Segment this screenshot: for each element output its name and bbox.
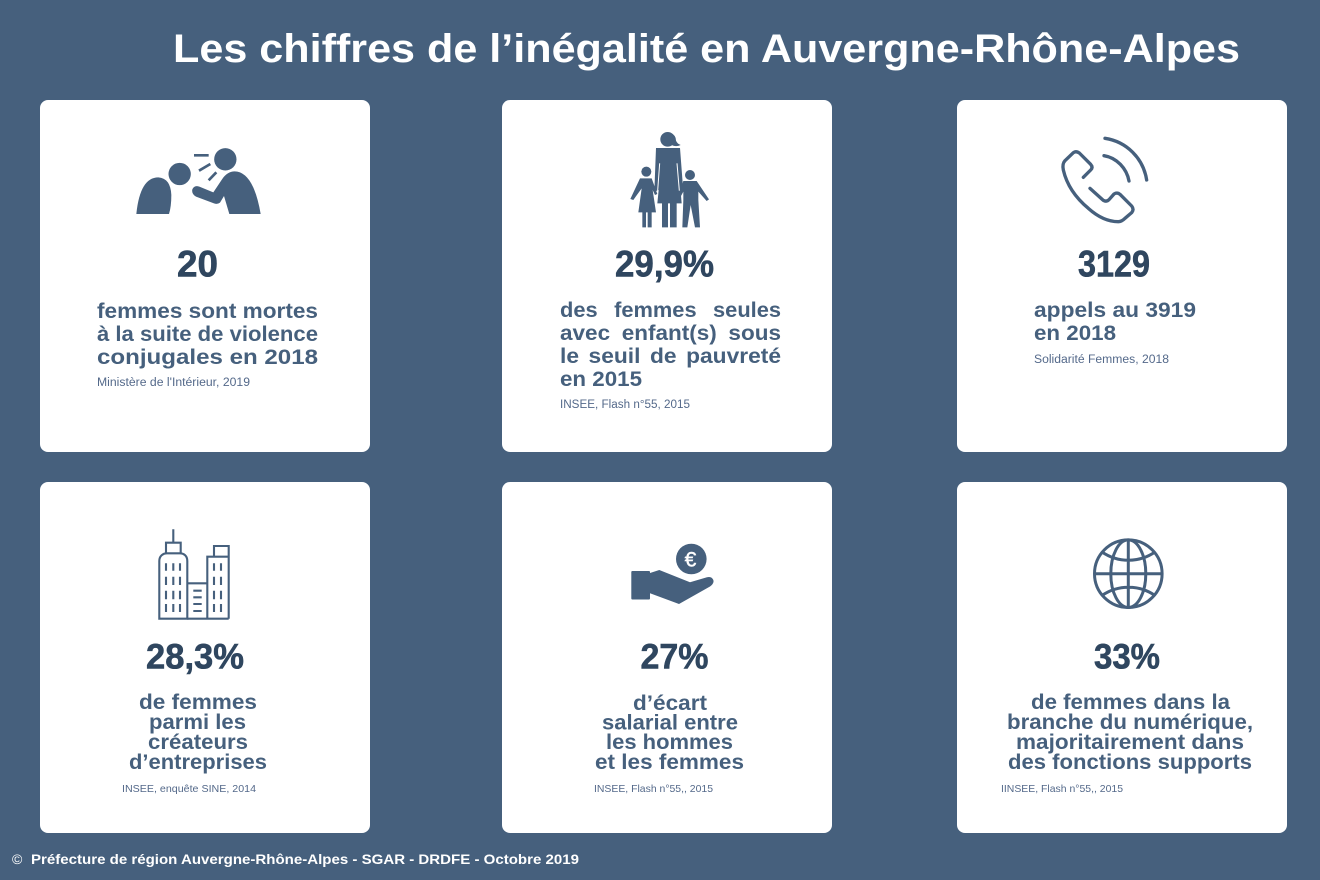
source: INSEE, Flash n°55, 2015 (560, 399, 690, 411)
description: salarial entre (602, 712, 738, 734)
icon: mother and two children (630, 132, 709, 227)
panel: violence conjugale (40, 100, 370, 452)
description (129, 691, 267, 774)
description (595, 692, 744, 774)
source: Solidarité Femmes, 2018 (1034, 354, 1169, 366)
description: le seuil de pauvreté (560, 345, 781, 368)
description: d’écart (633, 692, 707, 715)
key figure: 28,3% (146, 636, 244, 676)
description: parmi les (149, 711, 246, 734)
description: de femmes (139, 691, 257, 714)
description: les hommes (606, 731, 733, 754)
source: INSEE, Flash n°55,, 2015 (594, 783, 713, 795)
description (560, 299, 781, 391)
description: en 2018 (1034, 322, 1116, 345)
description: en 2015 (560, 368, 642, 391)
key figure: 29,9% (615, 244, 714, 284)
title: Les chiffres de l’inégalité en Auvergne-Rhône-Alpes (173, 27, 1240, 71)
description: majoritairement dans (1016, 731, 1244, 754)
panel: appels au 3919 (957, 100, 1287, 452)
description: femmes sont mortes (97, 300, 318, 323)
source: Ministère de l'Intérieur, 2019 (97, 377, 250, 389)
description: conjugales en 2018 (97, 346, 318, 369)
description: à la suite de violence (97, 323, 318, 346)
footer credit: © (12, 851, 23, 867)
description: créateurs (148, 731, 248, 754)
key figure: 3129 (1078, 244, 1150, 284)
key figure: 33% (1094, 636, 1160, 676)
icon: telephone (1063, 138, 1147, 222)
description: branche du numérique, (1007, 711, 1253, 734)
panel: branche du numérique (957, 482, 1287, 833)
description: d’entreprises (129, 751, 267, 774)
source: INSEE, enquête SINE, 2014 (122, 783, 256, 795)
footer credit: Préfecture de région Auvergne-Rhône-Alpes - SGAR - DRDFE - Octobre 2019 (31, 852, 579, 867)
description (1034, 299, 1196, 345)
key figure: 20 (177, 244, 218, 284)
icon: hand holding euro coin: € (685, 548, 697, 572)
key figure: 27% (640, 636, 708, 676)
description: des femmes seules (560, 299, 781, 322)
description (97, 300, 318, 369)
description: des fonctions supports (1008, 751, 1252, 774)
source: IINSEE, Flash n°55,, 2015 (1001, 783, 1123, 795)
description: avec enfant(s) sous (560, 322, 781, 345)
description: de femmes dans la (1031, 691, 1230, 714)
icon: office buildings (159, 529, 229, 619)
description: appels au 3919 (1034, 299, 1196, 322)
panel: créatrices d'entreprises (40, 482, 370, 833)
icon: globe (1094, 540, 1162, 608)
icon: violence between two people (136, 148, 261, 214)
description: et les femmes (595, 751, 744, 774)
description (1007, 691, 1253, 774)
icon: hand holding euro coin (631, 544, 714, 604)
panel: familles monoparentales (502, 100, 832, 452)
panel: écart salarial (502, 482, 832, 833)
